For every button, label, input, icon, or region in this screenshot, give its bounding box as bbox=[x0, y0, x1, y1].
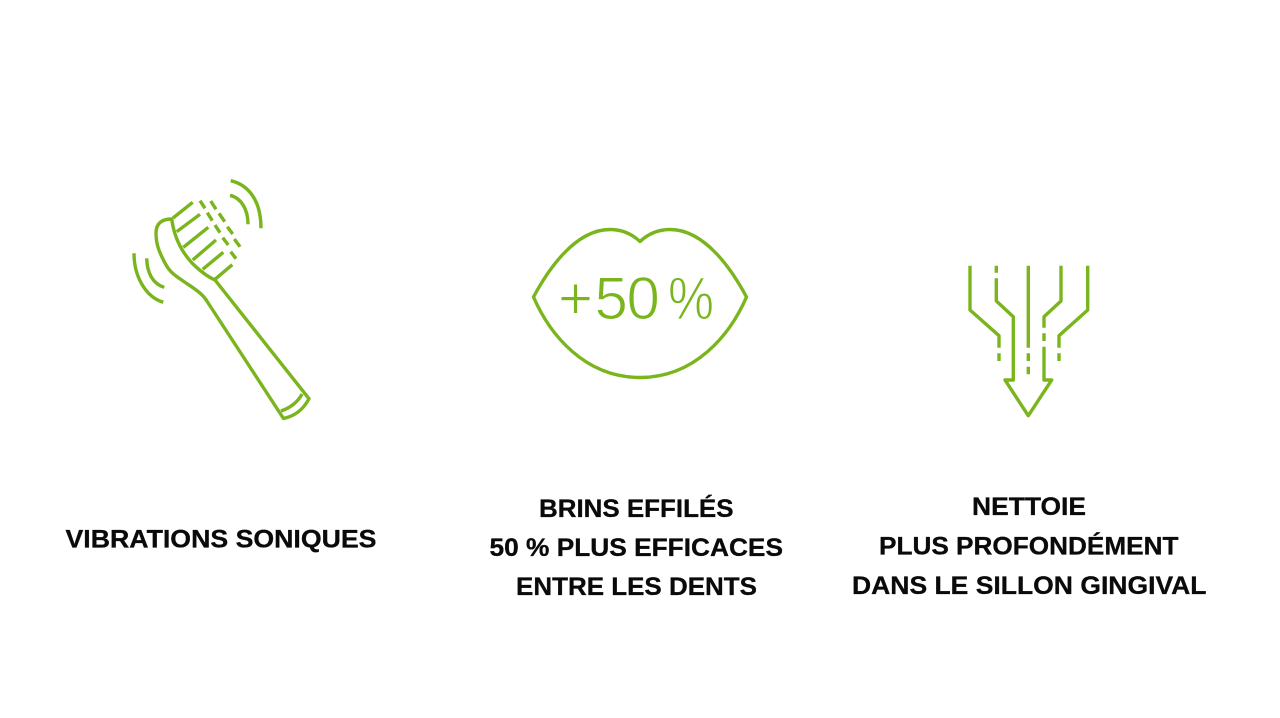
vibration arcs bbox=[134, 181, 261, 302]
left channel bbox=[970, 266, 999, 361]
text block: nettoie plus profondément: NETTOIE bbox=[972, 493, 1086, 521]
toothbrush outline bbox=[156, 219, 309, 418]
icon: converging arrow bbox=[970, 266, 1088, 416]
inner left channel and arrow head bbox=[996, 266, 1061, 416]
text block: nettoie plus profondément: DANS LE SILLON GINGIVAL bbox=[852, 572, 1206, 600]
panel: lips +50% bbox=[534, 230, 746, 378]
label: +50%: % bbox=[668, 265, 714, 332]
text block: brins effilés bbox=[490, 494, 783, 601]
bristle tips bbox=[200, 201, 240, 259]
text block: brins effilés: ENTRE LES DENTS bbox=[516, 573, 757, 601]
icon: toothbrush head with vibration arcs bbox=[134, 181, 309, 418]
center channel bbox=[1027, 266, 1030, 374]
bristles bbox=[173, 202, 232, 279]
icon: lips outline bbox=[534, 230, 746, 378]
text block: brins effilés: 50 % PLUS EFFICACES bbox=[490, 534, 783, 562]
text block: nettoie plus profondément: PLUS PROFONDÉMENT bbox=[879, 532, 1178, 560]
panel: sonic vibrations bbox=[134, 181, 309, 418]
text block: brins effilés: BRINS EFFILÉS bbox=[539, 494, 734, 523]
right channel bbox=[1059, 266, 1088, 361]
text block: nettoie plus profondément bbox=[852, 493, 1206, 600]
brush cap line bbox=[281, 394, 302, 411]
label: +50%: +50 bbox=[558, 265, 660, 332]
heading: vibrations soniques: VIBRATIONS SONIQUES bbox=[66, 526, 376, 554]
